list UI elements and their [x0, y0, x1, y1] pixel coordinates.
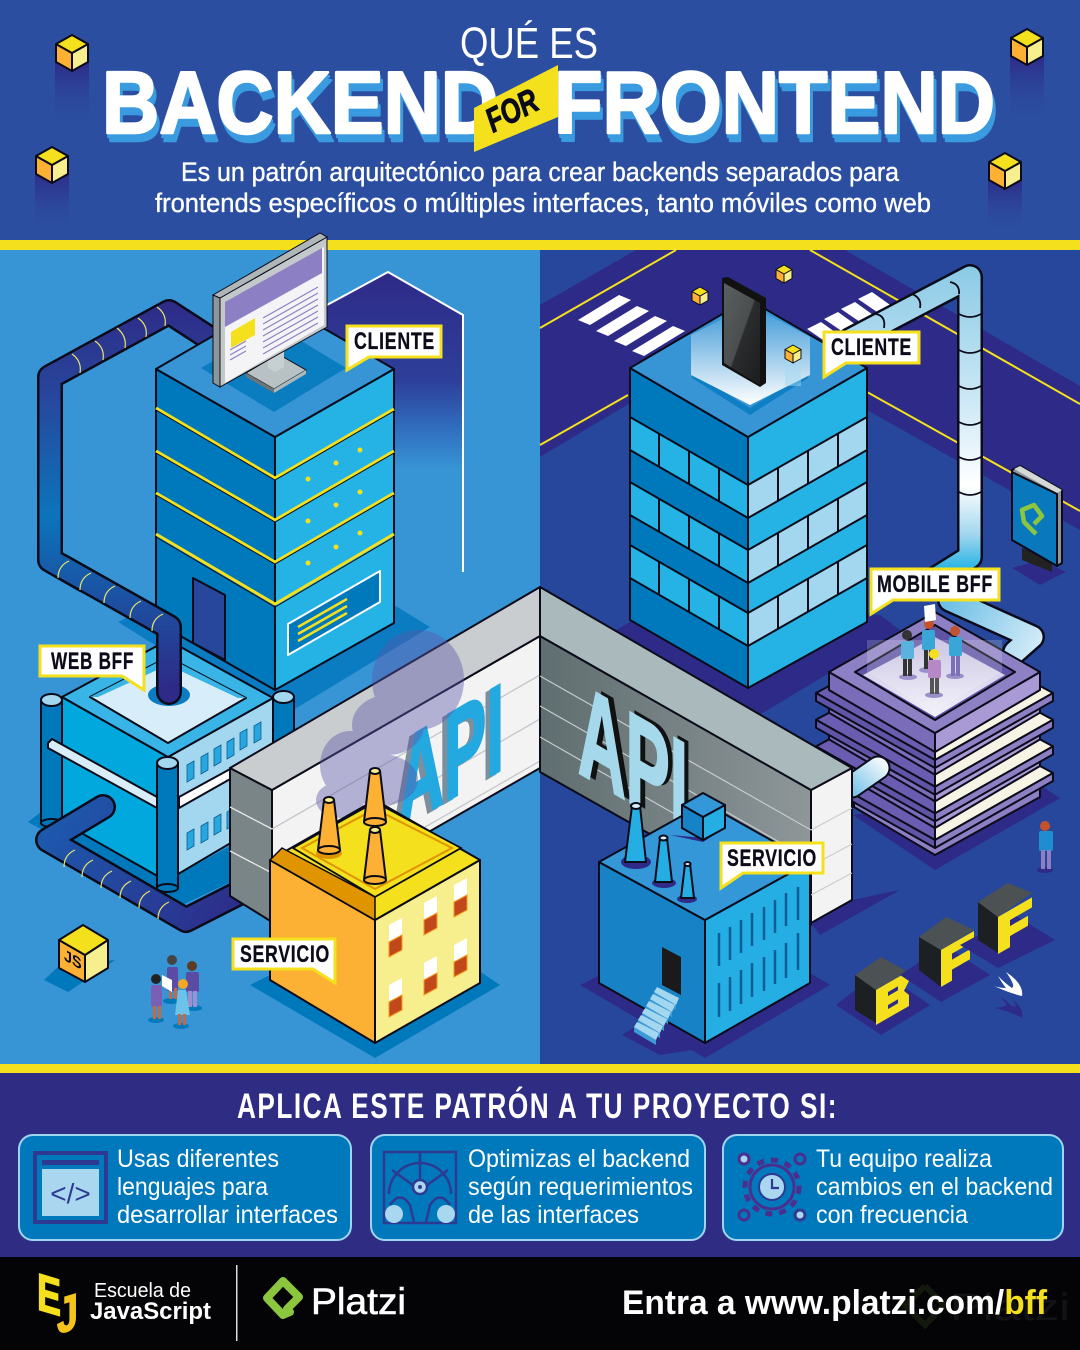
watermark platzi [905, 1286, 1070, 1329]
label: cliente web: CLIENTE [354, 328, 435, 355]
icon: floating cube top left [55, 35, 89, 130]
text: api right: API [578, 654, 688, 863]
label: web bff: WEB BFF [51, 648, 134, 675]
card: lenguajes: Usas diferentes [117, 1145, 279, 1173]
letter block: B [836, 957, 930, 1035]
icon: code window [35, 1153, 106, 1222]
building shadow: web bff [28, 812, 235, 906]
pipe stub to mobile bff [852, 768, 878, 786]
billboard [1012, 466, 1066, 585]
logo: escuela de javascript: Escuela de [94, 1280, 191, 1302]
icon: small cube A [692, 287, 708, 305]
crosswalk right [807, 292, 893, 344]
panel: right scene background [540, 250, 1080, 1065]
building shadow: mobile client [600, 610, 900, 722]
card: optimizas [371, 1135, 705, 1240]
watermark platzi: Platzi [950, 1287, 1070, 1329]
title: FRONTEND [555, 57, 996, 156]
road network [540, 250, 1080, 530]
icon: swift bird [994, 972, 1022, 1018]
text: api left: API [398, 657, 504, 856]
icon: gear clock [739, 1154, 805, 1220]
logo: escuela de javascript: E [37, 1263, 61, 1328]
building shadow: web client [118, 603, 430, 720]
label: cliente mobile [824, 332, 919, 377]
card: optimizas: Optimizas el backend [468, 1145, 690, 1173]
building shadow: mobile bff [853, 785, 1060, 870]
logo: platzi [267, 1281, 406, 1322]
header background [0, 0, 1080, 240]
top yellow bar [0, 240, 1080, 250]
stairs [634, 987, 679, 1045]
label: servicio left [233, 939, 335, 983]
label: cliente mobile: CLIENTE [831, 334, 912, 361]
pipe: mobile client to mobile bff [850, 277, 1032, 652]
title: BACKEND [105, 61, 501, 160]
title: QUÉ ES [460, 19, 598, 68]
crosswalk left [578, 295, 685, 356]
label: web bff [40, 646, 144, 690]
card: optimizas: según requerimientos [468, 1173, 693, 1201]
people group [148, 955, 202, 1029]
label: servicio right [721, 843, 823, 888]
title [102, 19, 998, 160]
wall shadow [811, 890, 900, 935]
card: equipo [723, 1135, 1063, 1240]
building: mobile client [630, 299, 867, 688]
building shadow: orange service [250, 965, 500, 1058]
call to action: Entra a www.platzi.com/bff [622, 1284, 1048, 1322]
building: web client [156, 300, 394, 690]
pentagon backdrop outline [327, 272, 463, 572]
icon: smartphone [722, 277, 766, 387]
card: equipo: con frecuencia [816, 1201, 968, 1229]
logo: escuela de javascript: J [57, 1283, 78, 1345]
label: servicio left: SERVICIO [240, 941, 330, 968]
title: FOR [479, 82, 545, 140]
title: FRONTEND [557, 61, 998, 160]
pipe: web bff to service [48, 807, 245, 920]
footer background [0, 1257, 1080, 1350]
icon: desktop monitor [213, 233, 327, 393]
letter block: second F [960, 883, 1055, 968]
label: cliente web [347, 326, 441, 370]
panel: bottom tips [0, 1064, 1080, 1257]
people on mobile bff [899, 604, 964, 698]
smoke cloud [316, 630, 464, 818]
icon: js cube: JS [64, 946, 82, 974]
letter block: F [900, 917, 990, 1002]
label: mobile bff [871, 569, 999, 614]
title: BACKEND [102, 53, 498, 152]
pipe: client to web bff lower [58, 561, 182, 705]
heading: aplica este patron: APLICA ESTE PATRÓN A TU PROYECTO SI: [237, 1086, 838, 1126]
icon: small cube B [776, 265, 792, 283]
card: lenguajes: desarrollar interfaces [117, 1201, 338, 1229]
subtitle: frontends específicos o múltiples interfaces, tanto móviles como web [155, 188, 931, 218]
pipe: client to web bff upper [50, 307, 206, 580]
icon: gears [384, 1152, 456, 1223]
wall: left wing [230, 587, 540, 922]
icon: rooftop cube [670, 793, 725, 842]
logo: escuela de javascript: JavaScript [90, 1298, 211, 1325]
person standing right [1037, 821, 1053, 873]
subtitle: Es un patrón arquitectónico para crear backends separados para [181, 157, 899, 187]
logo: platzi: Platzi [311, 1281, 406, 1322]
building shadow: blue service [580, 970, 830, 1058]
card: equipo: Tu equipo realiza [816, 1145, 992, 1173]
card: lenguajes [19, 1135, 351, 1240]
subtitle [155, 157, 931, 218]
icon: small cube C [785, 345, 801, 386]
icon: code window: </> [50, 1178, 91, 1209]
label: mobile bff: MOBILE BFF [877, 571, 993, 598]
text: API [584, 654, 692, 862]
icon: floating cube mid right [988, 153, 1022, 236]
icon: floating cube top right [1010, 29, 1044, 125]
title: BACKEND [103, 57, 499, 156]
text: api left [392, 657, 504, 860]
card: lenguajes: lenguajes para [117, 1173, 268, 1201]
building: orange service [270, 768, 480, 1043]
wall: right wing [540, 587, 852, 925]
text: api left: API [392, 660, 500, 860]
label: servicio right: SERVICIO [727, 845, 817, 872]
icon: floating cube mid left [35, 147, 69, 234]
building: mobile bff [816, 612, 1053, 855]
panel: left scene background [0, 250, 540, 1065]
stairs shadow [622, 1015, 705, 1055]
card: equipo: cambios en el backend [816, 1173, 1053, 1201]
building: blue service [599, 803, 810, 1045]
divider [236, 1265, 238, 1341]
icon: js cube [44, 925, 115, 992]
building: web bff [41, 640, 294, 892]
title: FRONTEND [554, 53, 995, 152]
text: api right [578, 654, 692, 863]
card: optimizas: de las interfaces [468, 1201, 639, 1229]
logo: escuela de javascript [37, 1263, 211, 1345]
